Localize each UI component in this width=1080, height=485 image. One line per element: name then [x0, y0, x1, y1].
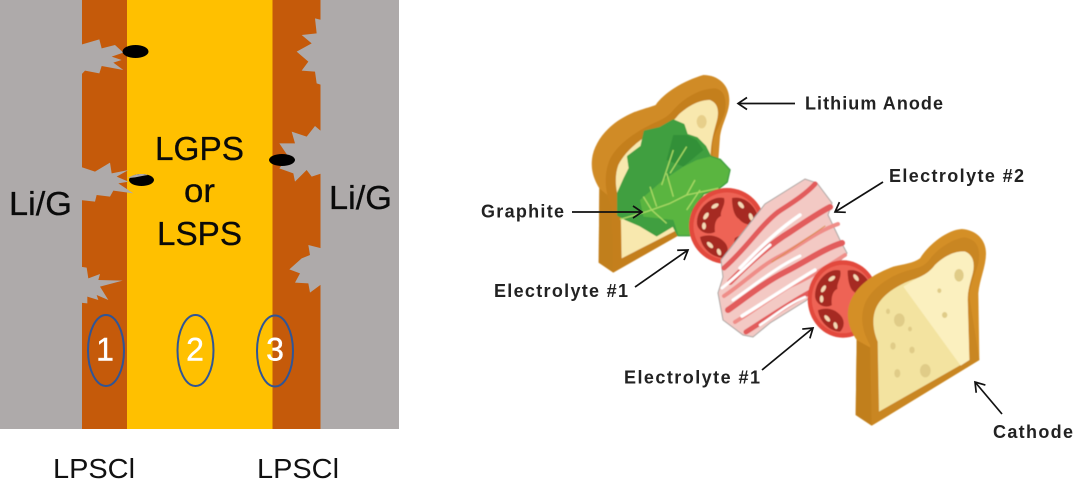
label with arrow: lower Electrolyte #1 — [624, 328, 813, 388]
label with arrow: Electrolyte #2: Electrolyte #2 — [889, 166, 1024, 186]
label with arrow: Graphite: Graphite — [481, 202, 564, 222]
left Li/G electrode layer — [0, 0, 82, 429]
label with arrow: lower Electrolyte #1: Electrolyte #1 — [624, 368, 760, 388]
marker 3: 3 — [266, 332, 284, 368]
lower tomato slice — [808, 260, 878, 338]
marker 1: 1 — [96, 332, 114, 368]
label: left Li/G: Li/G — [9, 186, 72, 223]
marker 2 — [178, 315, 214, 386]
black lithium deposits — [122, 45, 295, 186]
label with arrow: Electrolyte #2 — [835, 166, 1024, 212]
marker 1 — [88, 315, 124, 386]
label with arrow: upper Electrolyte #1: Electrolyte #1 — [494, 281, 628, 301]
label with arrow: Cathode — [975, 382, 1073, 442]
left LPSCl layer — [82, 0, 127, 429]
label with arrow: Lithium Anode: Lithium Anode — [805, 94, 943, 114]
lithium dendrites, right side — [279, 18, 322, 293]
label: central electrolyte: LGPS — [155, 131, 244, 168]
label: central electrolyte — [155, 131, 244, 253]
lettuce leaf — [618, 121, 729, 235]
label: right LPSCl: LPSCl — [257, 453, 339, 484]
label: central electrolyte: or — [184, 173, 215, 210]
panel: sandwich analogy illustration — [592, 75, 986, 426]
bacon strips — [718, 179, 847, 337]
right LPSCl layer — [272, 0, 320, 429]
lithium dendrites, left side — [80, 39, 133, 303]
label: central electrolyte: LSPS — [157, 216, 242, 253]
right Li/G electrode layer — [320, 0, 399, 429]
panel: battery cross-section — [0, 0, 399, 429]
label: right Li/G: Li/G — [329, 180, 392, 217]
anode bread slice — [592, 75, 729, 273]
upper tomato slice — [689, 188, 765, 264]
marker 2: 2 — [186, 332, 204, 368]
cathode bread slice — [848, 229, 986, 426]
label with arrow: upper Electrolyte #1 — [494, 250, 688, 301]
marker 3 — [257, 316, 293, 386]
label with arrow: Cathode: Cathode — [993, 422, 1073, 442]
central LGPS or LSPS layer — [127, 0, 272, 429]
label: left LPSCl: LPSCl — [53, 453, 135, 484]
